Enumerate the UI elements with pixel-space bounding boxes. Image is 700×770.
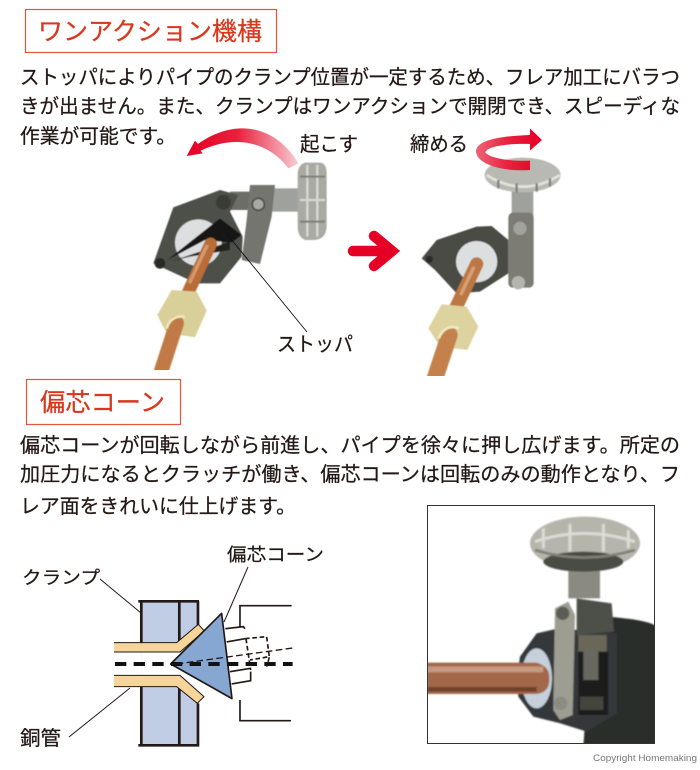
label: eccentric cone (224, 545, 324, 622)
leader line: stopper (226, 233, 307, 332)
arrow: rotate knob (476, 128, 542, 170)
housing (240, 606, 292, 721)
heading: eccentric cone: 偏芯コーン (40, 389, 165, 417)
text block: eccentric cone description: 偏芯コーンが回転しながら前進し、パイプを徐々に押し広げます。所定の (20, 434, 680, 457)
label: clamp (22, 568, 141, 613)
label: clamp: クランプ (22, 568, 100, 588)
text block: eccentric cone description: 加圧力になるとクラッチが働き、偏芯コーンは回転のみの動作となり、フ (20, 463, 680, 486)
cone (171, 613, 232, 699)
clamp block (138, 601, 200, 745)
photo: clamp closed (422, 158, 561, 383)
heading: eccentric cone (26, 380, 180, 424)
copper tube (114, 624, 204, 703)
clutch parts (225, 627, 269, 684)
text block: eccentric cone description (20, 434, 680, 518)
diagram: cone and flare cross-section (114, 601, 293, 745)
photo: flaring tool close-up (427, 506, 657, 747)
axis dashed lines (115, 658, 293, 670)
label: tighten: 締める (410, 133, 468, 156)
heading: one-action mechanism: ワンアクション機構 (38, 18, 262, 46)
text block: eccentric cone description: レア面をきれいに仕上げます。 (20, 495, 296, 518)
photo: clamp open with stopper (153, 163, 327, 380)
label: stopper: ストッパ (277, 334, 353, 356)
label: lift up: 起こす (300, 133, 358, 156)
copyright: Copyright Homemaking (593, 753, 697, 764)
arrow: lift up (curved left) (187, 128, 298, 168)
text block: one-action description: ストッパによりパイプのクランプ位置が一定するため、フレア加工にバラつ (20, 66, 680, 89)
label: copper tube (20, 688, 130, 750)
text block: one-action description: きが出ません。また、クランプはワンアクションで開閉でき、スピーディな (20, 95, 680, 118)
text block: one-action description: 作業が可能です。 (20, 125, 176, 148)
label: eccentric cone: 偏芯コーン (227, 545, 324, 565)
heading: one-action mechanism (26, 10, 276, 52)
label: copper tube: 銅管 (20, 727, 61, 750)
text block: one-action description (20, 66, 680, 148)
arrow: next step (353, 236, 392, 266)
